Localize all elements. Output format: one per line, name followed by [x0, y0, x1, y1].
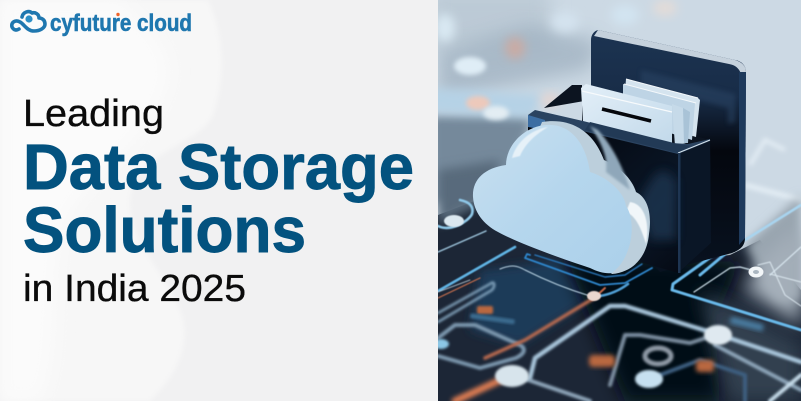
- cloud highlight: [512, 127, 548, 158]
- board surface: [438, 160, 801, 401]
- logo wordmark: cyfuture cloud: [50, 10, 192, 37]
- heading line: Data Storage: Data Storage: [23, 131, 414, 203]
- heading line: Solutions: Solutions: [23, 194, 306, 266]
- orange glowing trace: [485, 298, 594, 358]
- logo accent dot: [116, 13, 120, 16]
- panel: left background: [0, 0, 438, 401]
- storage holder back panel: [591, 30, 746, 272]
- middle paper edges: [674, 134, 686, 144]
- blurred foreground traces: [438, 283, 801, 401]
- storage holder front: [528, 110, 711, 273]
- circuit nodes: [433, 215, 764, 388]
- back papers: [623, 79, 700, 140]
- sharp traces near the cloud: [438, 200, 801, 330]
- icon: logo cloud: [12, 12, 45, 31]
- cloud side: [530, 121, 650, 274]
- holder inner back: [544, 85, 694, 144]
- document papers: [581, 79, 700, 146]
- photo background: [438, 0, 801, 290]
- heading line: in India 2025: in India 2025: [23, 268, 246, 310]
- logo: cyfuture cloud: [12, 10, 192, 37]
- heading line: Leading: Leading: [23, 93, 164, 135]
- paper label line: [602, 109, 651, 121]
- cloud front face: [473, 125, 632, 273]
- panel: photo of cloud storage on circuit board: [430, 0, 801, 401]
- title: [23, 93, 414, 310]
- circuit traces: [438, 200, 801, 401]
- cloud icon: [473, 121, 650, 274]
- front paper: [581, 84, 672, 144]
